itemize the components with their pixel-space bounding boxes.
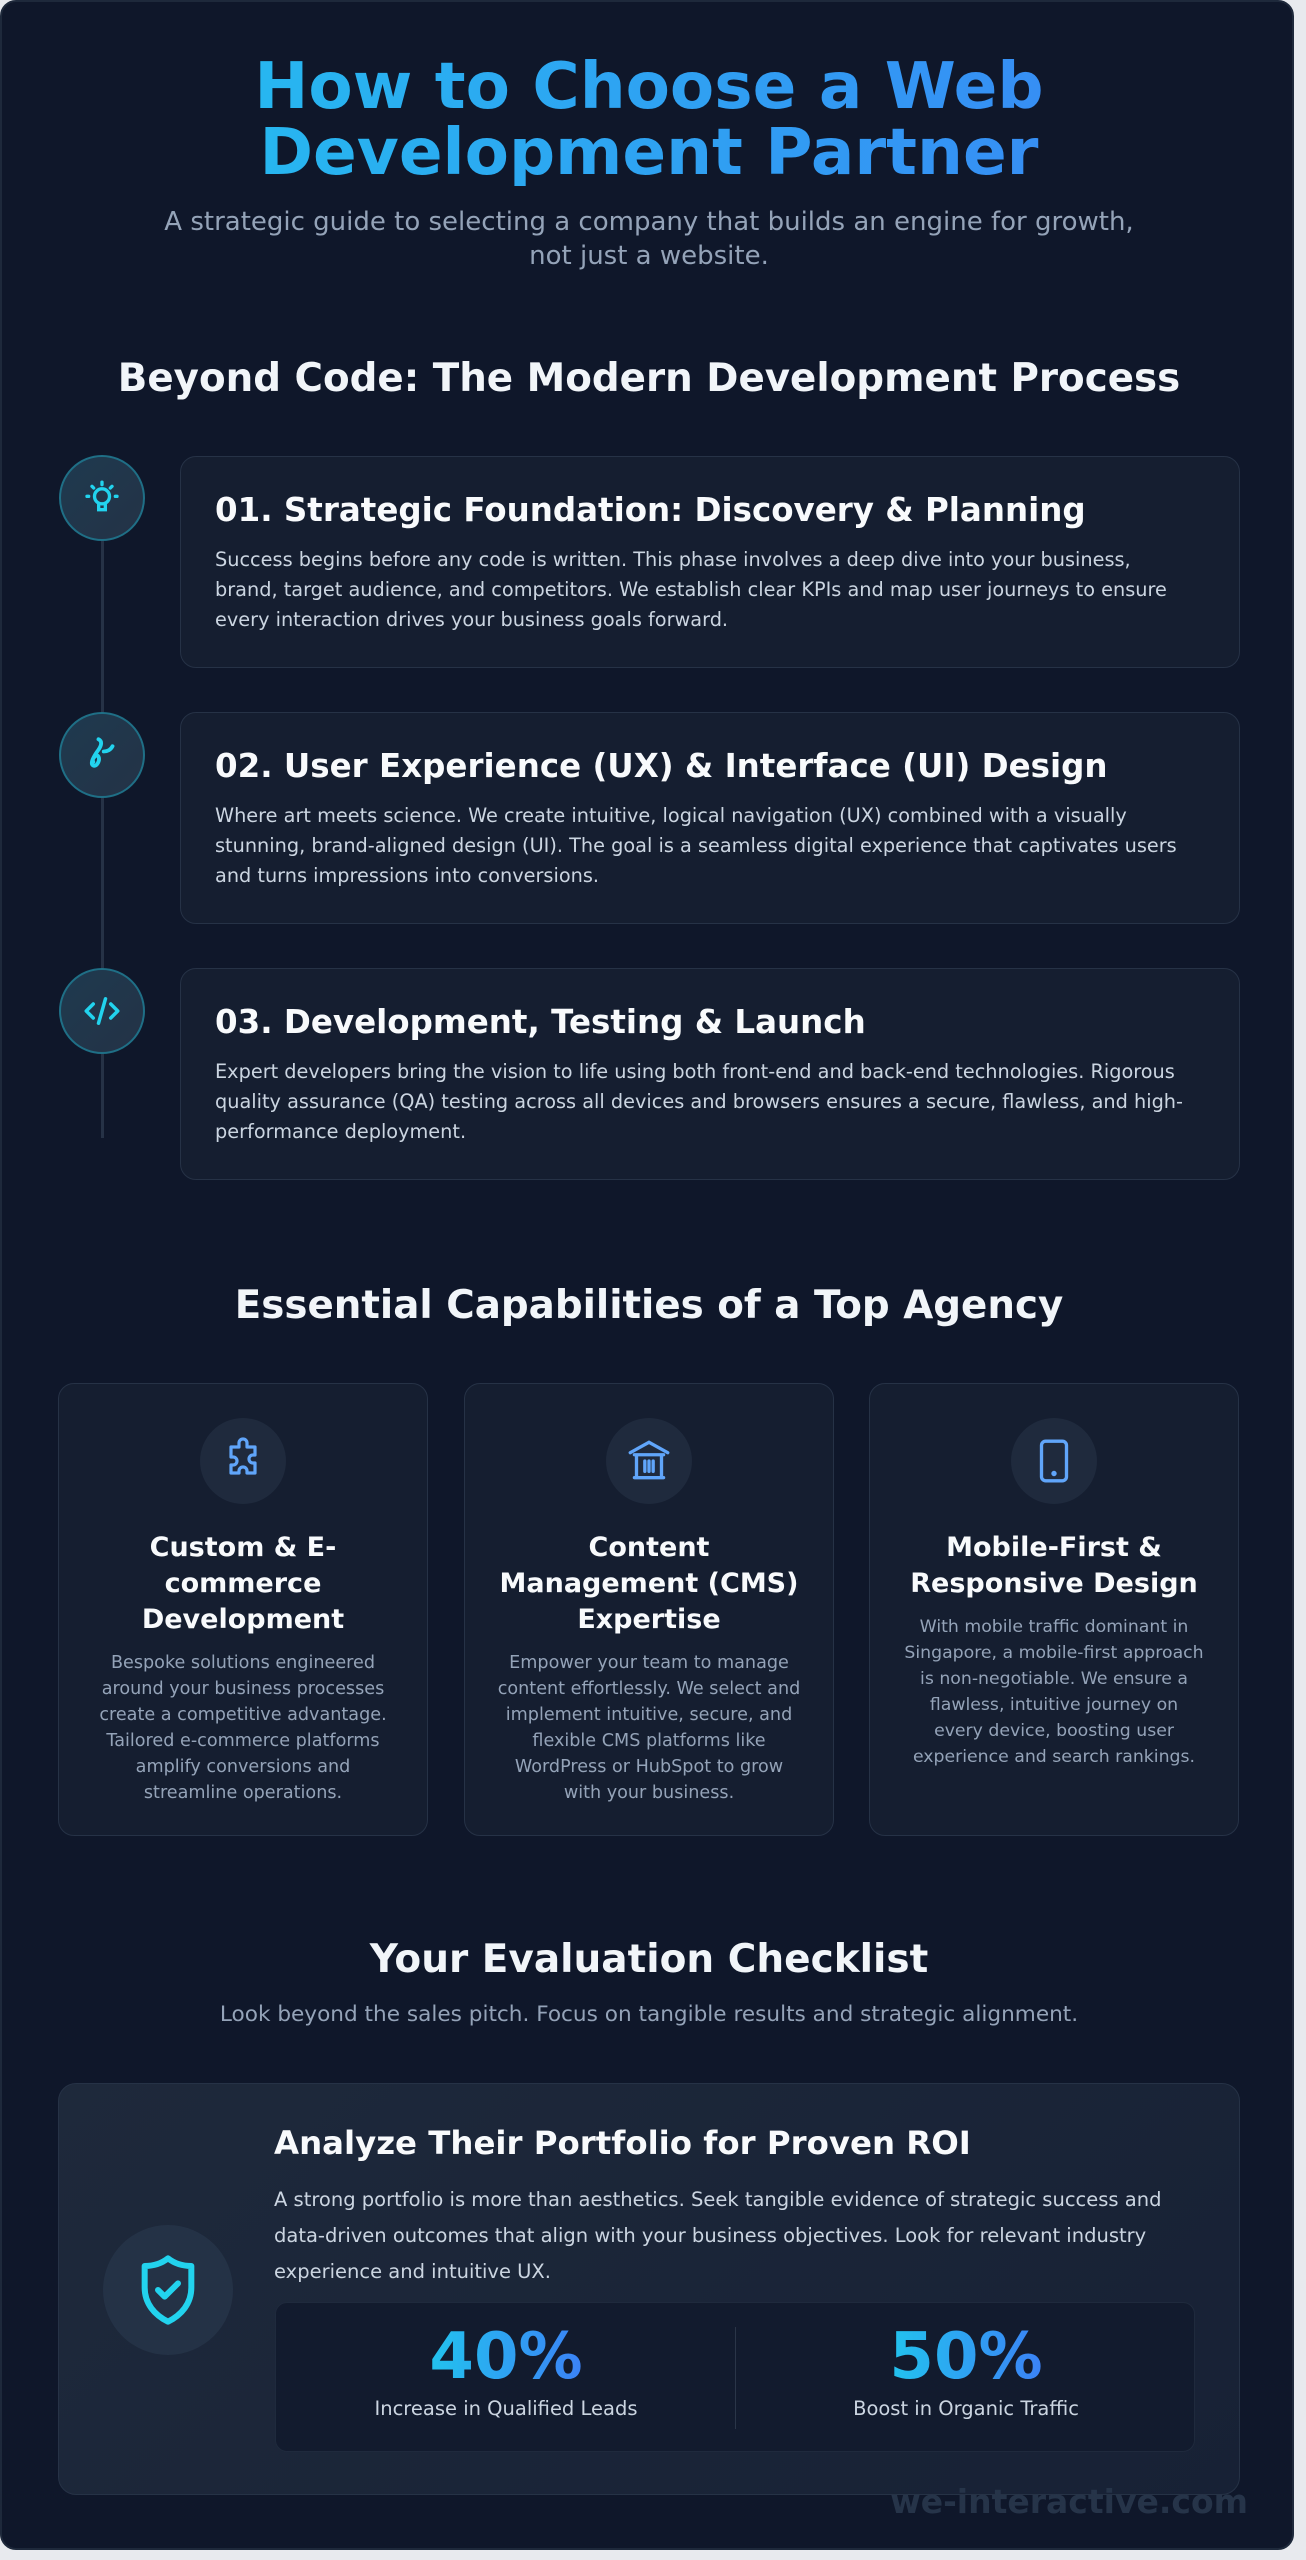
card: custom e-commerce: Bespoke solutions engineered around your business processes create a competitive advantage. Tailored e-commerce platforms amplify conversions and streamline operations. [99,1653,387,1803]
card: custom e-commerce: Custom & E-commerce Development [142,1532,344,1635]
step 3 card: 03. Development, Testing & Launch [215,1003,866,1041]
heading: capabilities: Essential Capabilities of a Top Agency [235,1283,1063,1328]
panel body: A strong portfolio is more than aesthetics. Seek tangible evidence of strategic success and data-driven outcomes that align with your business objectives. Look for relevant industry experience and intuitive UX. [274,2188,1161,2283]
card: mobile-first: experience and search rankings. [913,1747,1195,1767]
panel: portfolio ROI [58,2083,1240,2495]
card: CMS: Empower your team to manage content effortlessly. We select and implement intuitive, secure, and flexible CMS platforms like WordPress or HubSpot to grow with your business. [498,1653,800,1803]
icon: lightbulb [59,455,145,541]
card: mobile-first: With mobile traffic dominant in [920,1617,1188,1637]
icon: puzzle [200,1418,286,1504]
timeline line [101,502,104,1138]
card: CMS [464,1383,834,1836]
icon: code [59,968,145,1054]
title: How to Choose a Web [254,49,1044,124]
card: mobile-first: flawless, intuitive journey on [930,1695,1178,1715]
card: mobile-first: is non-negotiable. We ensure a [920,1669,1188,1689]
icon: building [606,1418,692,1504]
card: mobile-first: Mobile-First & [946,1532,1162,1563]
stat: 40%: Increase in Qualified Leads [374,2397,638,2420]
step 1 card: 01. Strategic Foundation: Discovery & Planning [215,491,1086,529]
card: CMS: Content Management (CMS) Expertise [500,1532,798,1635]
title: Development Partner [259,115,1038,190]
stat: 40% [374,2320,638,2420]
stat: 50%: 50% [889,2320,1043,2394]
icon: phone [1011,1418,1097,1504]
stat: 50%: Boost in Organic Traffic [853,2397,1079,2420]
subtitle: A strategic guide to selecting a company that builds an engine for growth, [164,207,1134,237]
subtitle: not just a website. [529,241,769,271]
card: mobile-first: Responsive Design [910,1568,1198,1599]
step 2 card: Where art meets science. We create intuitive, logical navigation (UX) combined with a visually stunning, brand-aligned design (UI). The goal is a seamless digital experience that captivates users and turns impressions into conversions. [215,804,1177,887]
checklist subtitle: Look beyond the sales pitch. Focus on tangible results and strategic alignment. [220,2002,1078,2027]
stats box [275,2302,1195,2452]
heading: checklist: Your Evaluation Checklist [370,1937,928,1982]
card: mobile-first [869,1383,1239,1836]
card: mobile-first: every device, boosting user [934,1721,1174,1741]
step 3 card [180,968,1240,1180]
step 2 card: 02. User Experience (UX) & Interface (UI) Design [215,747,1108,785]
stat: 40%: 40% [429,2320,583,2394]
card: custom e-commerce [58,1383,428,1836]
subtitle [164,207,1134,271]
watermark: we-interactive.com [890,2482,1248,2521]
step 1 card: brand, target audience, and competitors. We establish clear KPIs and map user journeys to ensure every interaction drives your business goals forward. [215,578,1167,631]
card: mobile-first: Singapore, a mobile-first approach [904,1643,1204,1663]
icon: shield check [103,2225,233,2355]
title [2,54,1296,186]
step 3 card: Expert developers bring the vision to life using both front-end and back-end technologies. Rigorous quality assurance (QA) testing across all devices and browsers ensures a secure, flawless, and high-performance deployment. [215,1060,1183,1143]
heading: process: Beyond Code: The Modern Development Process [118,356,1180,401]
stat: 50% [853,2320,1079,2420]
step 2 card [180,712,1240,924]
step 1 card [180,456,1240,668]
step 1 card: Success begins before any code is written. This phase involves a deep dive into your business, [215,548,1131,571]
panel title: Analyze Their Portfolio for Proven ROI [274,2124,971,2162]
icon: gesture [59,712,145,798]
